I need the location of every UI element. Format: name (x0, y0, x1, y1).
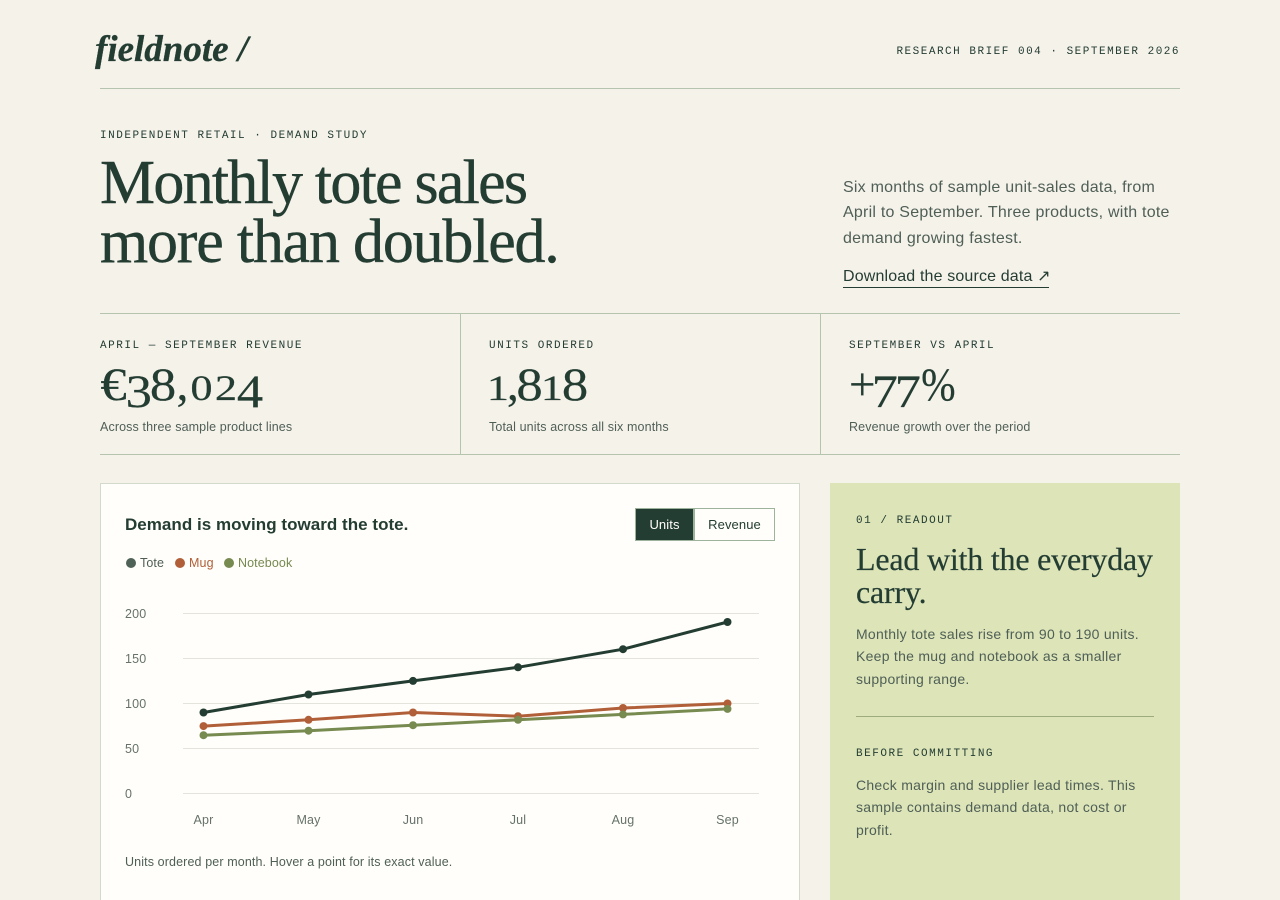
units value: 8 (562, 359, 588, 411)
revenue value: 2 (215, 368, 237, 408)
growth value (849, 359, 956, 418)
legend: notebook: Notebook (238, 556, 292, 570)
chart heading: Demand is moving toward the tote. (125, 515, 408, 534)
series: notebook (200, 705, 732, 739)
stat: growth (820, 314, 1181, 454)
main headline (100, 149, 559, 276)
legend: mug: Mug (189, 556, 214, 570)
revenue value: 0 (190, 368, 213, 408)
toggle: units: Units (649, 517, 680, 532)
panel: readout (830, 483, 1180, 900)
series: tote (200, 618, 732, 716)
line chart (125, 607, 759, 827)
x axis labels: Aug (612, 813, 634, 827)
issue label: RESEARCH BRIEF 004 · SEPTEMBER 2026 (896, 46, 1180, 58)
intro paragraph: April to September. Three products, with tote (843, 204, 1170, 221)
units value (487, 359, 588, 411)
chart note: Units ordered per month. Hover a point for its exact value. (125, 855, 452, 869)
toggle: units (635, 508, 694, 541)
eyebrow: INDEPENDENT RETAIL · DEMAND STUDY (100, 130, 368, 142)
revenue note: Across three sample product lines (100, 420, 292, 434)
growth value: + (849, 359, 876, 411)
revenue value: 3 (126, 366, 152, 418)
readout eyebrow: 01 / READOUT (856, 515, 953, 527)
stat: revenue (100, 340, 303, 434)
readout body: supporting range. (856, 671, 970, 687)
growth value: 7 (872, 366, 898, 418)
y axis labels: 0 (125, 787, 132, 801)
growth value: % (921, 359, 956, 411)
intro paragraph: Six months of sample unit-sales data, from (843, 178, 1155, 196)
growth label: SEPTEMBER VS APRIL (849, 340, 995, 352)
legend (126, 556, 292, 570)
revenue value: , (177, 359, 188, 411)
units label: UNITS ORDERED (489, 340, 595, 352)
y axis labels: 50 (125, 742, 139, 756)
units value: 8 (516, 359, 543, 411)
readout body (856, 626, 1139, 687)
x axis labels: May (296, 813, 321, 827)
toggle: revenue (694, 508, 775, 541)
y axis labels (125, 607, 146, 801)
main headline: Monthly tote sales (100, 149, 526, 217)
stats band (100, 313, 1180, 455)
before committing body: sample contains demand data, not cost or (856, 799, 1127, 815)
units value: 1 (541, 368, 563, 408)
before committing body (856, 777, 1136, 838)
revenue value (100, 359, 263, 418)
revenue label: APRIL — SEPTEMBER REVENUE (100, 340, 303, 352)
toggle: revenue: Revenue (708, 517, 761, 532)
intro paragraph: demand growing fastest. (843, 230, 1023, 247)
download link: Download the source data ↗ (843, 268, 1051, 285)
logo: fieldnote / (95, 29, 248, 70)
legend: mug (175, 556, 214, 570)
panel: chart card (100, 483, 800, 900)
readout heading: Lead with the everyday (856, 540, 1153, 576)
y axis labels: 150 (125, 652, 146, 666)
units value: 1 (487, 368, 509, 408)
revenue value: 8 (150, 359, 176, 411)
revenue value: € (100, 359, 127, 411)
legend: tote: Tote (140, 556, 164, 570)
growth note: Revenue growth over the period (849, 420, 1030, 434)
intro paragraph (843, 178, 1170, 247)
x axis labels: Jun (403, 813, 423, 827)
revenue value: 4 (237, 366, 263, 418)
units note: Total units across all six months (489, 420, 669, 434)
units value: , (507, 359, 519, 411)
readout body: Monthly tote sales rise from 90 to 190 units. (856, 626, 1139, 642)
before committing body: Check margin and supplier lead times. This (856, 777, 1136, 793)
before committing label: BEFORE COMMITTING (856, 748, 994, 760)
legend: tote (126, 556, 164, 570)
readout body: Keep the mug and notebook as a smaller (856, 648, 1122, 664)
before committing body: profit. (856, 822, 893, 838)
readout heading (856, 540, 1153, 610)
growth value: 7 (895, 366, 921, 418)
main headline: more than doubled. (100, 208, 559, 276)
x axis labels: Apr (194, 813, 213, 827)
readout heading: carry. (856, 574, 926, 610)
stat: units (460, 314, 821, 454)
x axis labels (194, 813, 739, 827)
y axis labels: 100 (125, 697, 146, 711)
y axis labels: 200 (125, 607, 146, 621)
x axis labels: Jul (510, 813, 526, 827)
x axis labels: Sep (716, 813, 739, 827)
series: mug (200, 700, 732, 730)
